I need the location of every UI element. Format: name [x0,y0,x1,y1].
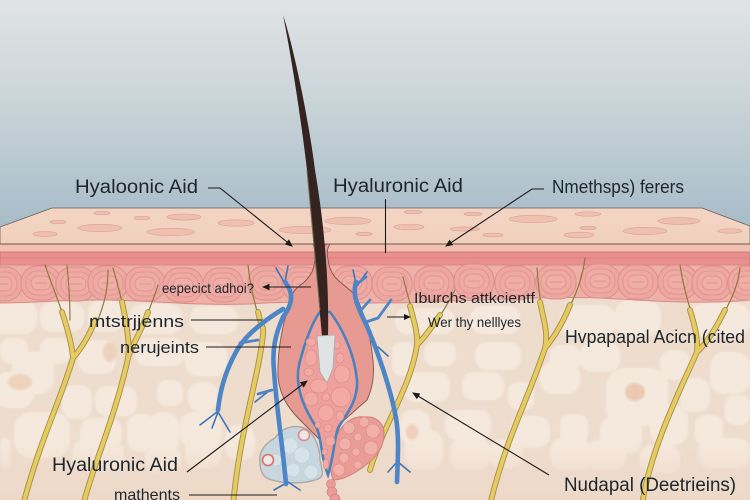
label: Hyaluronic Aid top [333,176,463,253]
yellow nerve fibres [23,258,740,500]
label: eepecict adhoi: eepecict adhoi? [162,280,254,296]
spiral cell row [0,264,750,302]
label: Wer thy nelllyes [387,314,521,330]
follicle bulb [298,312,357,475]
label: nerujeints: nerujeints [120,338,199,357]
dermis bands [0,244,750,304]
hair root [317,335,335,383]
label: Nmethsps ferers [446,177,684,246]
label: Hyaluronic Aid lower: Hyaluronic Aid [52,455,178,476]
label: Nudapal Deetrieins [413,393,736,496]
skin pores [33,210,742,238]
label: Hyaloonic Aid: Hyaloonic Aid [75,177,198,198]
sky background [0,0,750,230]
label: Iburchs attkcientf: Iburchs attkcientf [414,290,536,307]
fatty tissue layer [0,260,750,500]
skin top surface [0,208,750,246]
label: Wer thy nelllyes: Wer thy nelllyes [428,314,521,330]
hair shaft [283,15,335,383]
label: Nmethsps ferers: Nmethsps) ferers [552,177,684,197]
label: Hvpapapal Acicn: Hvpapapal Acicn (cited [565,327,745,347]
sebaceous gland [330,417,384,480]
label: Hyaloonic Aid [75,177,292,246]
blue blood vessels [200,266,410,490]
label: Hyaluronic Aid top: Hyaluronic Aid [333,176,463,197]
follicle sheath [278,244,373,450]
label: mtstrjjenns: mtstrjjenns [89,312,184,331]
blue-grey gland [260,427,322,483]
label: Nudapal Deetrieins: Nudapal (Deetrieins) [564,475,736,496]
label: Hyaluronic Aid lower [52,381,307,476]
bead chain [326,480,340,500]
